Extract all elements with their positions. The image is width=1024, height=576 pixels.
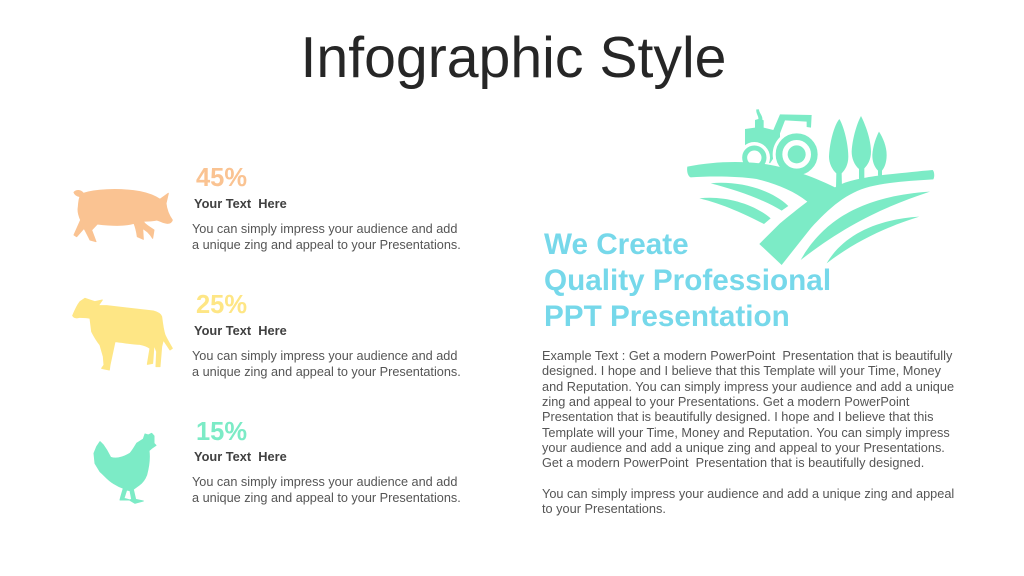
text block: pig description: [192, 222, 461, 252]
text block: example paragraph: Get a modern PowerPoint Presentation that is beautifully designed.: [542, 455, 924, 470]
field stripe left lower: [699, 198, 771, 224]
title: Infographic Style: [300, 26, 726, 90]
tree left: [829, 119, 848, 188]
hill and central road: [687, 162, 934, 265]
text block: cow description: a unique zing and appeal to your Presentations.: [192, 365, 461, 379]
percentage: 15%: 15%: [196, 418, 247, 446]
label: cow heading: Your Text Here: [194, 323, 287, 338]
field stripe right upper: [801, 192, 930, 260]
text block: example paragraph: and Reputation. You can simply impress your audience and add a unique: [542, 379, 954, 394]
heading: we create: [544, 228, 831, 333]
heading: we create: We Create: [544, 228, 689, 261]
field stripe left upper: [711, 183, 788, 211]
text block: hen description: You can simply impress your audience and add: [192, 475, 457, 489]
label: hen heading: Your Text Here: [194, 449, 287, 464]
text block: cow description: You can simply impress your audience and add: [192, 349, 457, 363]
percentage: 25%: 25%: [196, 291, 247, 319]
text block: pig description: You can simply impress your audience and add: [192, 222, 457, 236]
text block: hen description: a unique zing and appeal to your Presentations.: [192, 491, 461, 505]
text block: example paragraph: Presentation that is beautifully designed. I hope and I believe that this: [542, 409, 934, 424]
tractor: [739, 109, 887, 188]
heading: we create: PPT Presentation: [544, 300, 790, 333]
field stripe right lower: [827, 217, 919, 263]
label: pig heading: Your Text Here: [194, 196, 287, 211]
text block: example paragraph: Template will your Time, Money and Reputation. You can simply impress: [542, 425, 950, 440]
percentage: 45%: 45%: [196, 164, 247, 192]
text block: example paragraph: You can simply impress your audience and add a unique zing and appeal: [542, 486, 954, 501]
text block: example paragraph: your audience and add a unique zing and appeal to your Presentations.: [542, 440, 945, 455]
text block: cow description: [192, 349, 461, 379]
text block: example paragraph: designed. I hope and I believe that this Template will your Time, Money: [542, 363, 941, 378]
text block: example paragraph: Example Text : Get a modern PowerPoint Presentation that is beautifully: [542, 348, 952, 363]
tree centre: [852, 116, 871, 181]
text block: example paragraph: to your Presentations.: [542, 501, 666, 516]
text block: pig description: a unique zing and appeal to your Presentations.: [192, 238, 461, 252]
text block: example paragraph: [542, 348, 954, 516]
heading: we create: Quality Professional: [544, 264, 831, 297]
tree right: [872, 132, 887, 176]
text block: example paragraph: zing and appeal to your Presentations. Get a modern PowerPoint: [542, 394, 909, 409]
text block: hen description: [192, 475, 461, 505]
